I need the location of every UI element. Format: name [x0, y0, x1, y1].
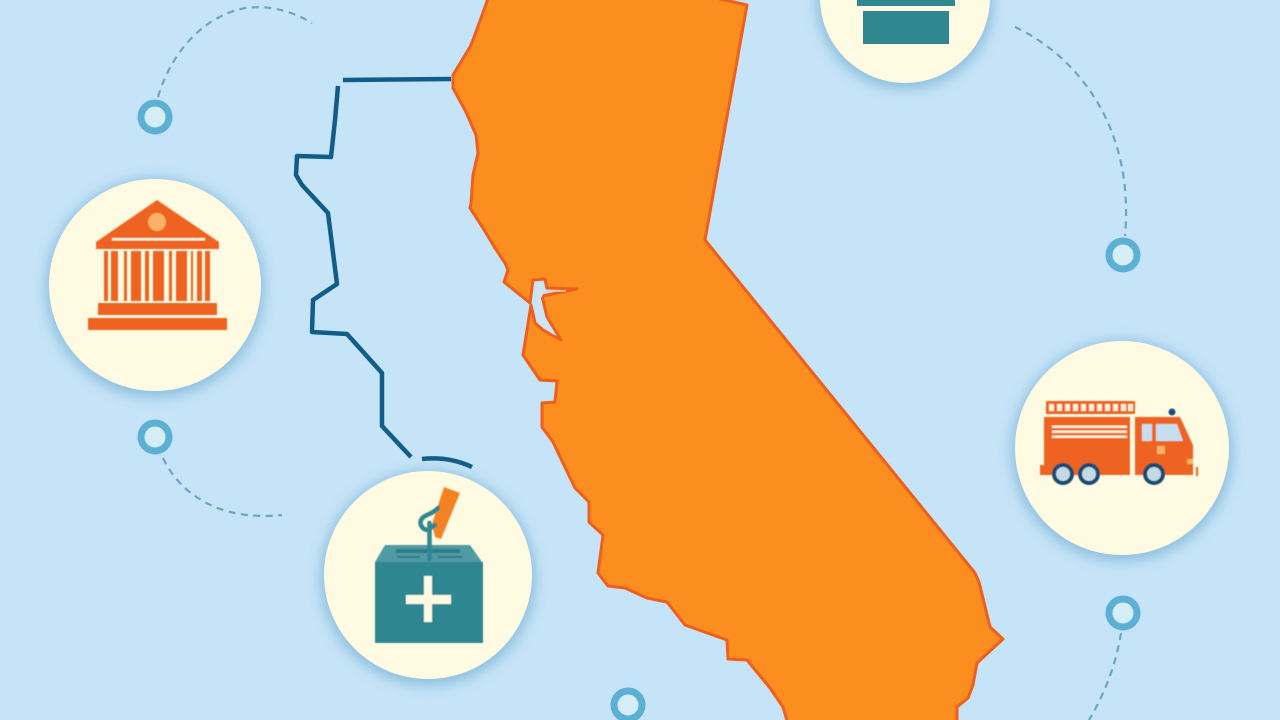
- ring marker: bottom left: [141, 423, 169, 451]
- icon: ballot box: [375, 487, 483, 643]
- ring marker: top left: [141, 103, 169, 131]
- badge circle: [49, 179, 261, 391]
- icon: ballot paper: [432, 487, 460, 539]
- panel: fire truck badge: [1012, 341, 1232, 561]
- badge circle: [324, 471, 532, 679]
- ladder: [1046, 401, 1135, 414]
- panel: top badge: [817, 0, 993, 89]
- siren: [1168, 408, 1176, 416]
- icon: fire truck: [1040, 401, 1198, 483]
- panel: ballot box badge: [321, 471, 535, 685]
- badge shadow: [817, 0, 993, 89]
- dashed arc: top right: [1015, 27, 1126, 236]
- wheels: [1054, 465, 1163, 483]
- ring marker: bottom right: [1109, 599, 1137, 627]
- panel: courthouse badge: [46, 179, 264, 397]
- cab: [1135, 417, 1193, 475]
- body: [1044, 417, 1130, 475]
- map: San Francisco Bay: [536, 283, 554, 335]
- dashed arc: bottom right: [1089, 633, 1121, 720]
- badge circle: [820, 0, 990, 83]
- map: California: [453, 0, 1003, 720]
- navy outline: offset coast line: [296, 79, 472, 467]
- ring marker: top right: [1109, 241, 1137, 269]
- dashed arc: bottom left: [163, 458, 282, 516]
- icon: hand: [421, 508, 438, 559]
- badge shadow: [321, 471, 535, 685]
- ring marker: bottom centre: [614, 691, 642, 719]
- map: bay shoreline highlight: [546, 290, 566, 292]
- badge circle: [1015, 341, 1229, 555]
- icon: teal block: [857, 0, 955, 44]
- icon: courthouse: [88, 200, 227, 330]
- dashed arc: top left: [158, 7, 312, 97]
- badge shadow: [1012, 341, 1232, 561]
- badge shadow: [46, 179, 264, 397]
